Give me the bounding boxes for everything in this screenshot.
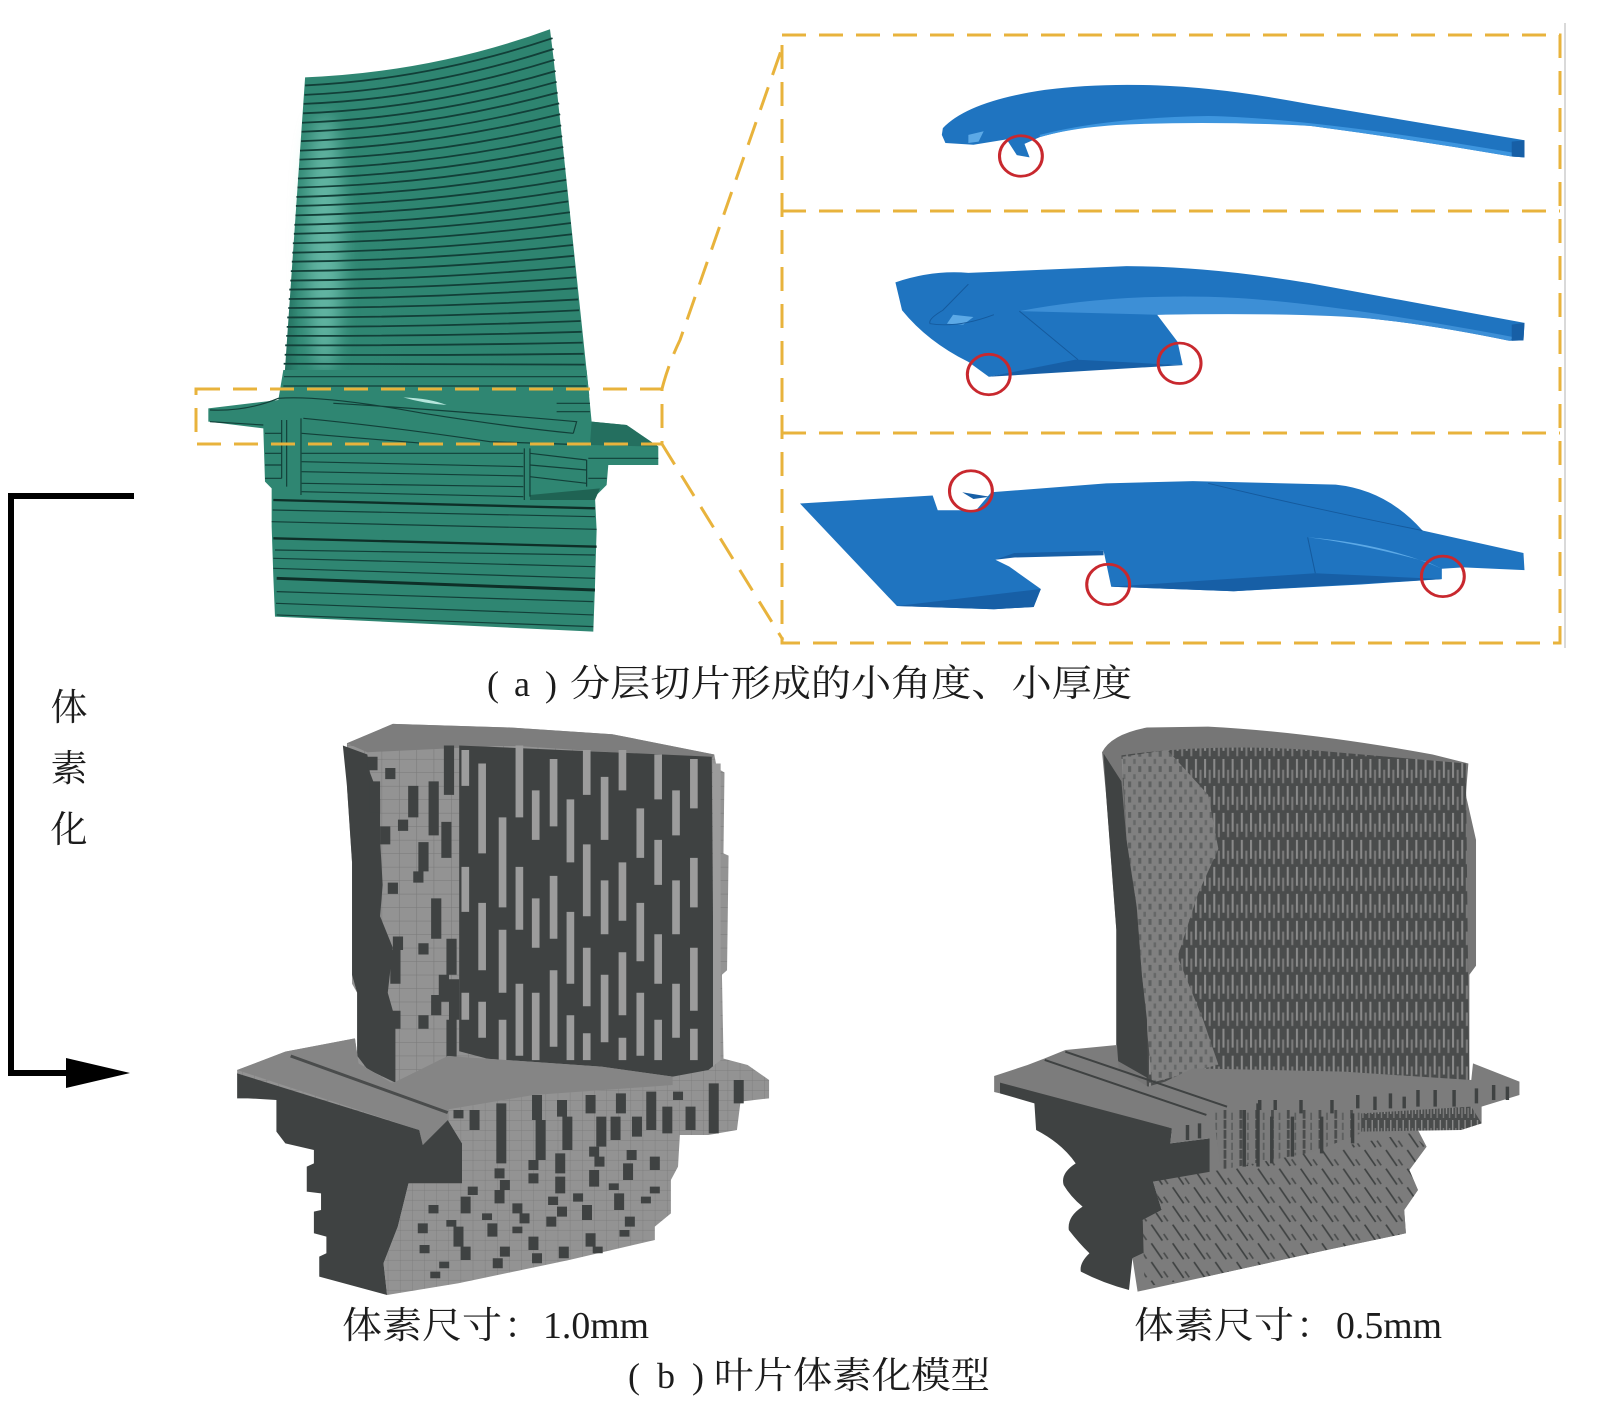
panel border: thin right edge [1564,23,1566,648]
section 2 [895,266,1524,377]
blade airfoil [283,29,589,396]
voxel platform and root [237,1038,769,1295]
red circles marking small angles [949,136,1464,605]
caption b [628,1355,990,1397]
label: voxelization vertical text [50,688,88,851]
label: voxel size 0.5mm: 0.5mm [1336,1305,1442,1347]
section 1 [942,85,1524,157]
panel: blue cross sections [800,85,1524,609]
label: voxelization vertical text: 体 [50,688,88,729]
label: voxel size 1.0mm: ： [504,1306,541,1347]
panel: layered green blade [208,29,658,632]
caption a: 分层切片形成的小角度、小厚度 [570,663,1132,705]
fine voxel airfoil [1102,727,1476,1092]
caption b: ( b ) [628,1356,704,1396]
voxel blade airfoil [343,724,729,1092]
label: voxel size 0.5mm: 体素尺寸 [1134,1305,1294,1347]
fine voxel platform and root [994,1045,1519,1292]
voxel model 0.5mm [994,727,1519,1292]
label: voxelization vertical text: 化 [50,810,88,851]
arrow: voxelization flow [11,496,134,1088]
label: voxel size 1.0mm [342,1305,649,1347]
label: voxelization vertical text: 素 [50,749,88,790]
voxel model 1.0mm [237,724,769,1295]
blade platform and root [208,370,658,632]
caption b: 叶片体素化模型 [714,1355,990,1397]
zoom callout: dashed selection and connectors [196,35,1560,643]
label: voxel size 0.5mm [1134,1305,1442,1347]
label: voxel size 1.0mm: 体素尺寸 [342,1305,502,1347]
label: voxel size 1.0mm: 1.0mm [543,1305,649,1347]
section 3 [800,481,1524,609]
label: voxel size 0.5mm: ： [1296,1306,1333,1347]
caption a: ( a ) [487,664,557,704]
